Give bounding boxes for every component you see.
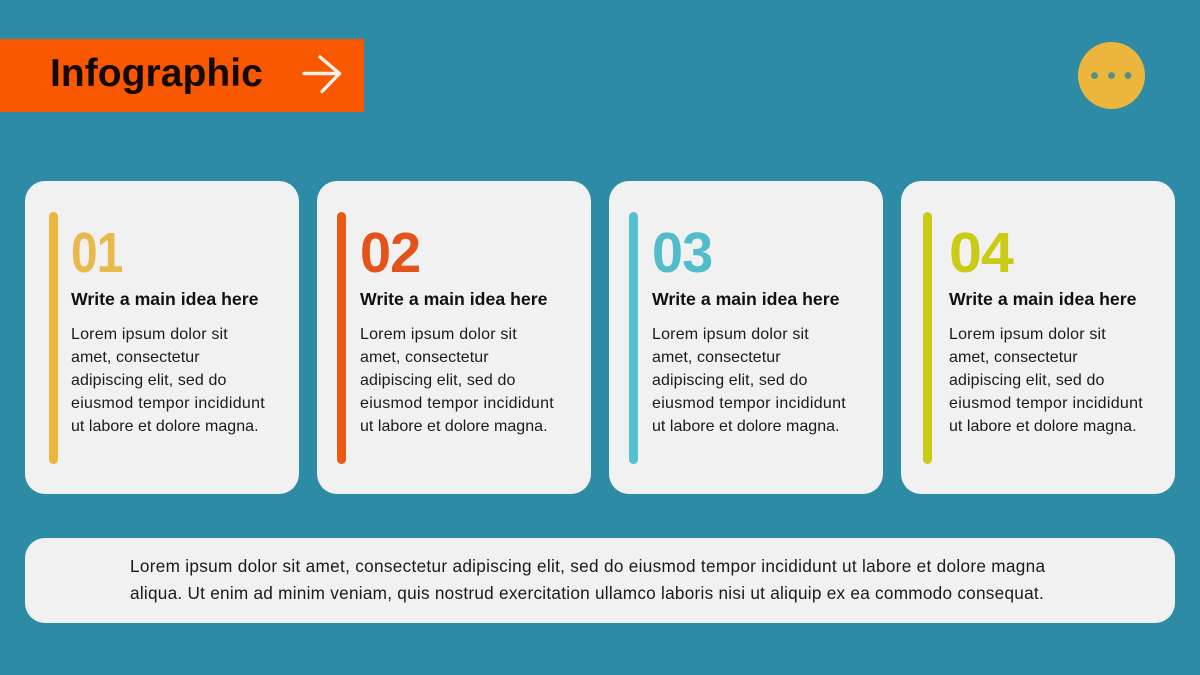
panel: bottom note: [25, 538, 1175, 623]
text 03: adipiscing elit, sed do: [652, 372, 808, 389]
title banner: [0, 39, 364, 112]
bottom note text: aliqua. Ut enim ad minim veniam, quis nostrud exercitation ullamco laboris nisi ut aliquip ex ea commodo consequat.: [130, 583, 1044, 603]
heading 04: Write a main idea here: [949, 289, 1136, 309]
number 01: 01: [71, 221, 123, 285]
text 02: Lorem ipsum dolor sit: [360, 326, 517, 343]
panel: card 04: [901, 181, 1175, 494]
text 02: adipiscing elit, sed do: [360, 372, 516, 389]
text 03: ut labore et dolore magna.: [652, 418, 840, 435]
text 03: [652, 326, 846, 435]
number 03: 03: [652, 221, 712, 285]
text 02: ut labore et dolore magna.: [360, 418, 548, 435]
text 04: [949, 326, 1143, 435]
accent bar 01: [49, 212, 58, 464]
text 01: adipiscing elit, sed do: [71, 372, 227, 389]
bottom note text: [130, 556, 1046, 603]
text 01: ut labore et dolore magna.: [71, 418, 259, 435]
text 02: eiusmod tempor incididunt: [360, 395, 554, 412]
panel: card 01: [25, 181, 299, 494]
text 04: amet, consectetur: [949, 349, 1078, 366]
text 04: eiusmod tempor incididunt: [949, 395, 1143, 412]
panel: card 03: [609, 181, 883, 494]
number 02: 02: [360, 221, 420, 285]
icon: arrow: [302, 55, 342, 94]
panel: card 02: [317, 181, 591, 494]
accent bar 04: [923, 212, 932, 464]
text 03: eiusmod tempor incididunt: [652, 395, 846, 412]
text 04: Lorem ipsum dolor sit: [949, 326, 1106, 343]
icon: more options circle: [1078, 42, 1145, 109]
text 04: ut labore et dolore magna.: [949, 418, 1137, 435]
text 01: [71, 326, 265, 435]
accent bar 03: [629, 212, 638, 464]
heading 02: Write a main idea here: [360, 289, 547, 309]
accent bar 02: [337, 212, 346, 464]
text 02: amet, consectetur: [360, 349, 489, 366]
text 01: Lorem ipsum dolor sit: [71, 326, 228, 343]
number 04: 04: [949, 221, 1013, 285]
heading 03: Write a main idea here: [652, 289, 839, 309]
text 04: adipiscing elit, sed do: [949, 372, 1105, 389]
heading 01: Write a main idea here: [71, 289, 258, 309]
text 02: [360, 326, 554, 435]
text 03: amet, consectetur: [652, 349, 781, 366]
text 01: amet, consectetur: [71, 349, 200, 366]
text 03: Lorem ipsum dolor sit: [652, 326, 809, 343]
text 01: eiusmod tempor incididunt: [71, 395, 265, 412]
title: Infographic: [50, 52, 263, 95]
bottom note text: Lorem ipsum dolor sit amet, consectetur adipiscing elit, sed do eiusmod tempor incididunt ut labore et dolore magna: [130, 556, 1045, 576]
